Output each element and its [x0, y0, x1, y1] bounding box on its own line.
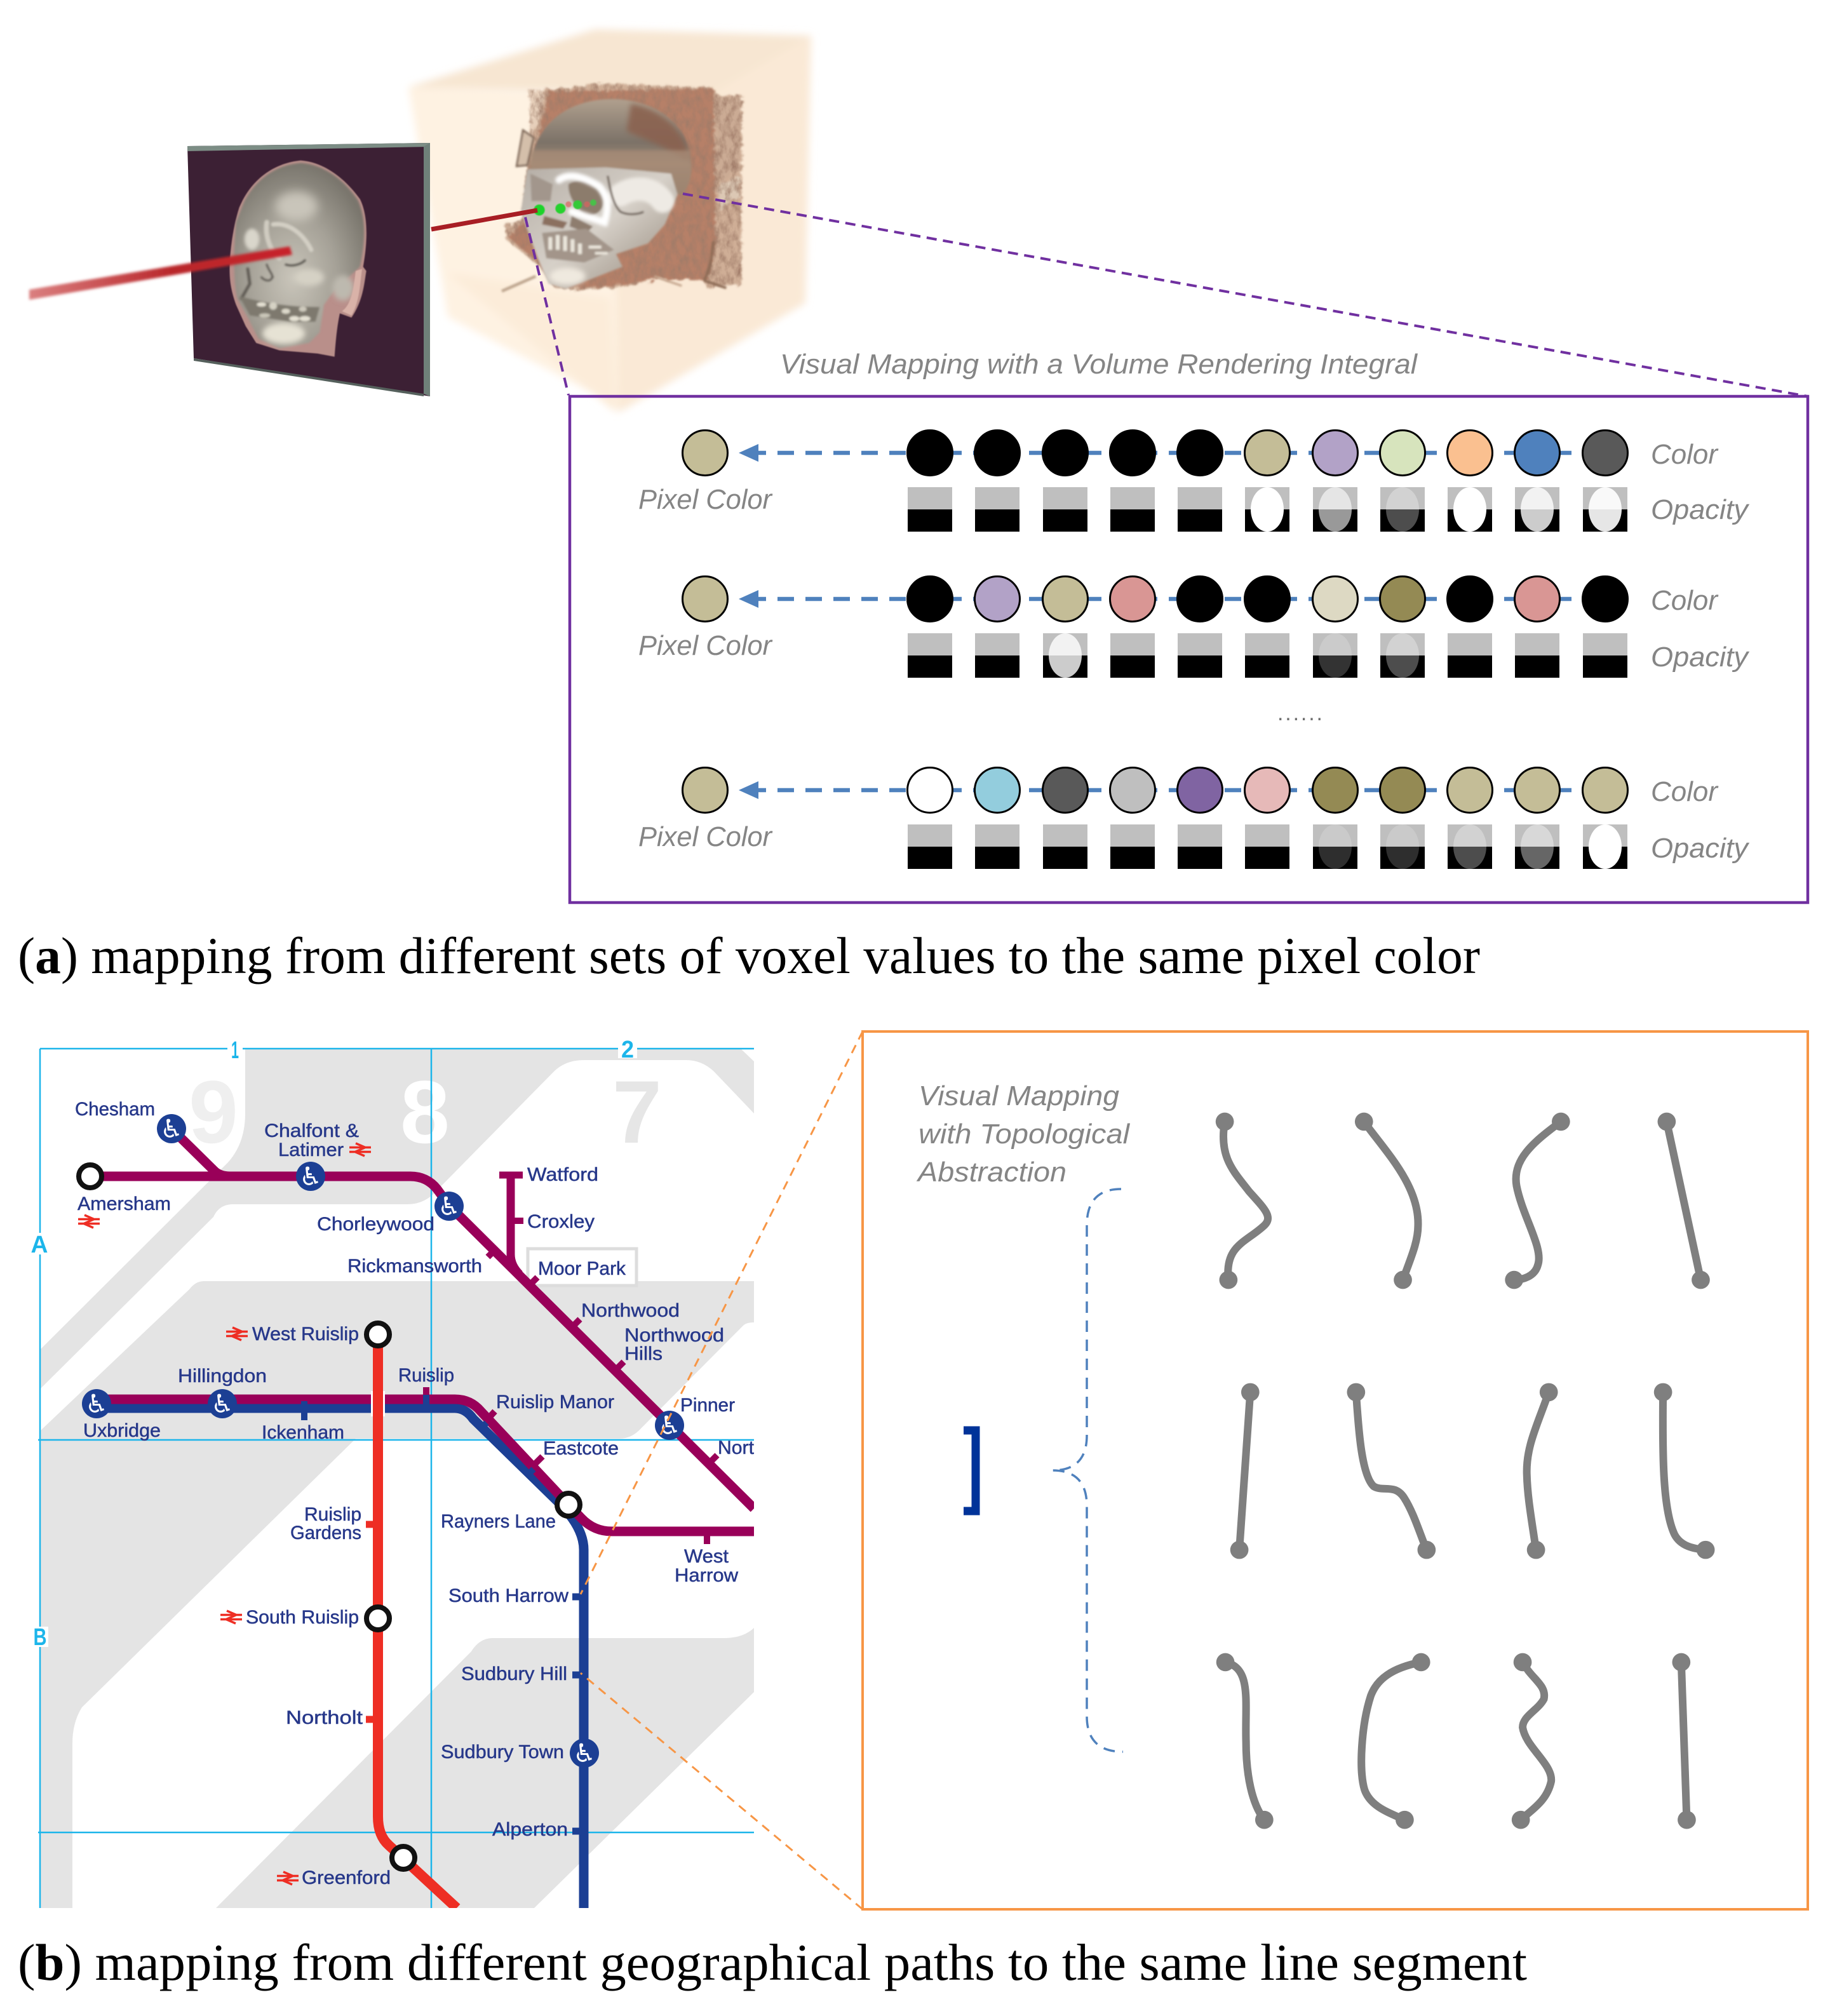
metro lines: [90, 1129, 754, 1908]
zone numbers: 7: [612, 1062, 662, 1162]
row 3 pixel color circle: [682, 767, 728, 813]
station labels: West: [684, 1546, 729, 1567]
row 2 arrow: [739, 590, 1571, 608]
volume cube: [408, 29, 811, 413]
heading: topological abstraction: [916, 1080, 1130, 1188]
station labels: South Ruislip: [246, 1607, 359, 1628]
row 2 labels: Opacity: [1651, 642, 1750, 673]
station labels: Rayners Lane: [441, 1511, 556, 1532]
wheelchair glyphs: ♿: [211, 1390, 234, 1419]
skull face: [521, 167, 678, 289]
station labels: Greenford: [302, 1867, 391, 1888]
skin outline: [229, 161, 367, 357]
bone group: [234, 163, 364, 348]
row 1 labels: Pixel Color: [638, 484, 773, 515]
path 12: [1672, 1653, 1696, 1829]
grid label A: A: [30, 1232, 48, 1258]
row 2 color circles: [907, 577, 1627, 621]
orange dashed connectors: [581, 1032, 863, 1909]
national rail symbols: [78, 1143, 371, 1885]
row 2 opacity cells: [908, 633, 1627, 678]
row 3 labels: Color: [1651, 776, 1719, 807]
teeth: [239, 297, 320, 322]
station labels: Sudbury Town: [441, 1742, 564, 1763]
map background bands: [40, 1049, 754, 1908]
station labels: Harrow: [675, 1565, 738, 1586]
station labels: Eastcote: [543, 1438, 619, 1459]
wheelchair glyphs: ♿: [299, 1162, 322, 1192]
row 2 pixel color circle: [682, 577, 728, 621]
image plane: [187, 143, 430, 396]
row 2: ray samples: [638, 577, 1750, 678]
wheelchair glyphs: ♿: [85, 1390, 108, 1419]
skull bone group: [502, 99, 726, 291]
row 2 labels: Pixel Color: [638, 630, 773, 661]
row 3 labels: [638, 776, 1750, 864]
row 2 labels: [638, 585, 1750, 673]
station labels: Ickenham: [262, 1422, 344, 1443]
caption a: (a) mapping from different sets of voxel values to the same pixel color: [18, 927, 1480, 984]
station labels: West Ruislip: [252, 1324, 359, 1345]
station labels: Ruislip: [398, 1365, 454, 1386]
path 7: [1527, 1383, 1558, 1559]
station labels: Nort: [718, 1437, 755, 1458]
panel: topological abstraction: [863, 1032, 1808, 1909]
ray: front segment: [29, 246, 292, 300]
step-free stations: [82, 1114, 684, 1768]
path 2: [1355, 1113, 1418, 1289]
eye ridges: [241, 222, 311, 299]
grid label 1: 1: [231, 1037, 239, 1064]
station labels: South Harrow: [448, 1585, 569, 1606]
panel: volume rendering mapping: [570, 396, 1808, 903]
path 11: [1512, 1653, 1551, 1829]
station labels: Pinner: [680, 1395, 735, 1416]
ray: back segment: [431, 210, 537, 229]
ear flap: [516, 130, 534, 166]
grid lines: [38, 1049, 754, 1908]
purple line: [90, 1129, 754, 1544]
station labels: Chorleywood: [317, 1214, 434, 1235]
blue line: [97, 1408, 584, 1908]
path 6: [1347, 1383, 1436, 1559]
geographical path variants: [1216, 1113, 1714, 1829]
cheek shadow: [608, 176, 643, 214]
station labels: Latimer: [278, 1139, 344, 1160]
station labels: Northwood: [581, 1300, 680, 1321]
path 3: [1505, 1113, 1570, 1289]
tissue: [506, 84, 742, 290]
wheelchair glyphs: ♿: [658, 1411, 681, 1441]
row 2 labels: Color: [1651, 585, 1719, 616]
line segment icon: [964, 1430, 976, 1511]
Moor Park box: [528, 1249, 636, 1286]
grid label 2: 2: [621, 1037, 634, 1063]
row 1 color circles: [907, 431, 1627, 475]
station labels: [75, 1099, 755, 1888]
skull volume with tissue: [502, 84, 742, 291]
path 1: [1216, 1113, 1268, 1289]
row 1: ray samples: [638, 431, 1750, 532]
station labels: Amersham: [77, 1193, 171, 1214]
blue ticks over purple: [304, 1395, 534, 1475]
highlights: [275, 192, 318, 221]
station labels: Alperton: [492, 1819, 568, 1840]
row 1 labels: Opacity: [1651, 494, 1750, 525]
row 1 arrow: [739, 444, 1571, 462]
row 3 color circles: [907, 767, 1627, 813]
wheelchair glyphs: ♿: [438, 1192, 461, 1221]
path 10: [1361, 1653, 1430, 1829]
row 1 opacity cells: [908, 487, 1627, 532]
row 3 labels: Opacity: [1651, 833, 1750, 864]
heading: topological abstraction: Visual Mapping: [918, 1080, 1120, 1112]
bone: [234, 163, 364, 348]
bright bone highlights: [559, 176, 663, 222]
path 8: [1654, 1383, 1714, 1559]
caption b: (b) mapping from different geographical paths to the same line segment: [18, 1933, 1527, 1991]
ear: [342, 269, 362, 316]
path 4: [1658, 1113, 1710, 1289]
station labels: Hills: [624, 1343, 663, 1364]
row 3: ray samples: [638, 767, 1750, 869]
row 3 arrow: [739, 781, 1571, 799]
station labels: Northolt: [286, 1707, 363, 1728]
wheelchair glyphs: [85, 1115, 681, 1768]
chin: [549, 267, 586, 285]
station labels: Croxley: [527, 1211, 595, 1232]
station labels: Gardens: [290, 1522, 361, 1543]
wheelchair glyphs: ♿: [573, 1739, 596, 1768]
path 9: [1216, 1653, 1274, 1829]
rendered skull on image plane: [229, 161, 367, 357]
interchange stations: [79, 1165, 580, 1869]
skull dome: [529, 99, 691, 195]
grid label 1: [227, 1037, 243, 1064]
path 5: [1230, 1383, 1260, 1559]
station labels: Moor Park: [538, 1258, 626, 1279]
station labels: Watford: [527, 1164, 598, 1185]
row 3 opacity cells: [908, 824, 1627, 869]
station labels: Hillingdon: [178, 1366, 267, 1387]
wheelchair glyphs: ♿: [160, 1115, 183, 1144]
row 1 labels: [638, 439, 1750, 525]
row 1 labels: Color: [1651, 439, 1719, 470]
station labels: Chesham: [75, 1099, 155, 1120]
dashed brace: [1053, 1189, 1123, 1752]
purple dashed connectors: [525, 194, 1808, 396]
station labels: Ruislip Manor: [496, 1392, 614, 1413]
station labels: Ruislip: [304, 1504, 361, 1525]
station labels: Chalfont &: [264, 1120, 359, 1141]
heading: visual mapping integral: Visual Mapping with a Volume Rendering Integral: [780, 349, 1418, 380]
row 3 labels: Pixel Color: [638, 821, 773, 852]
station labels: Rickmansworth: [347, 1256, 482, 1277]
zone numbers: [189, 1062, 662, 1162]
station labels: Northwood: [624, 1325, 724, 1346]
zone numbers: 9: [189, 1062, 238, 1162]
grid label B: B: [33, 1624, 47, 1651]
ellipsis between rows: ......: [1277, 701, 1322, 725]
row 1 pixel color circle: [682, 431, 728, 475]
sample points: [534, 199, 596, 215]
teeth: [542, 229, 614, 262]
station labels: Sudbury Hill: [461, 1663, 567, 1684]
heading: topological abstraction: with Topological: [918, 1119, 1130, 1150]
eye socket: [569, 181, 603, 215]
heading: topological abstraction: Abstraction: [916, 1157, 1067, 1188]
red line: [366, 1334, 457, 1908]
station labels: Uxbridge: [83, 1420, 161, 1441]
panel: metro map: [30, 1037, 755, 1908]
zone numbers: 8: [400, 1062, 450, 1162]
